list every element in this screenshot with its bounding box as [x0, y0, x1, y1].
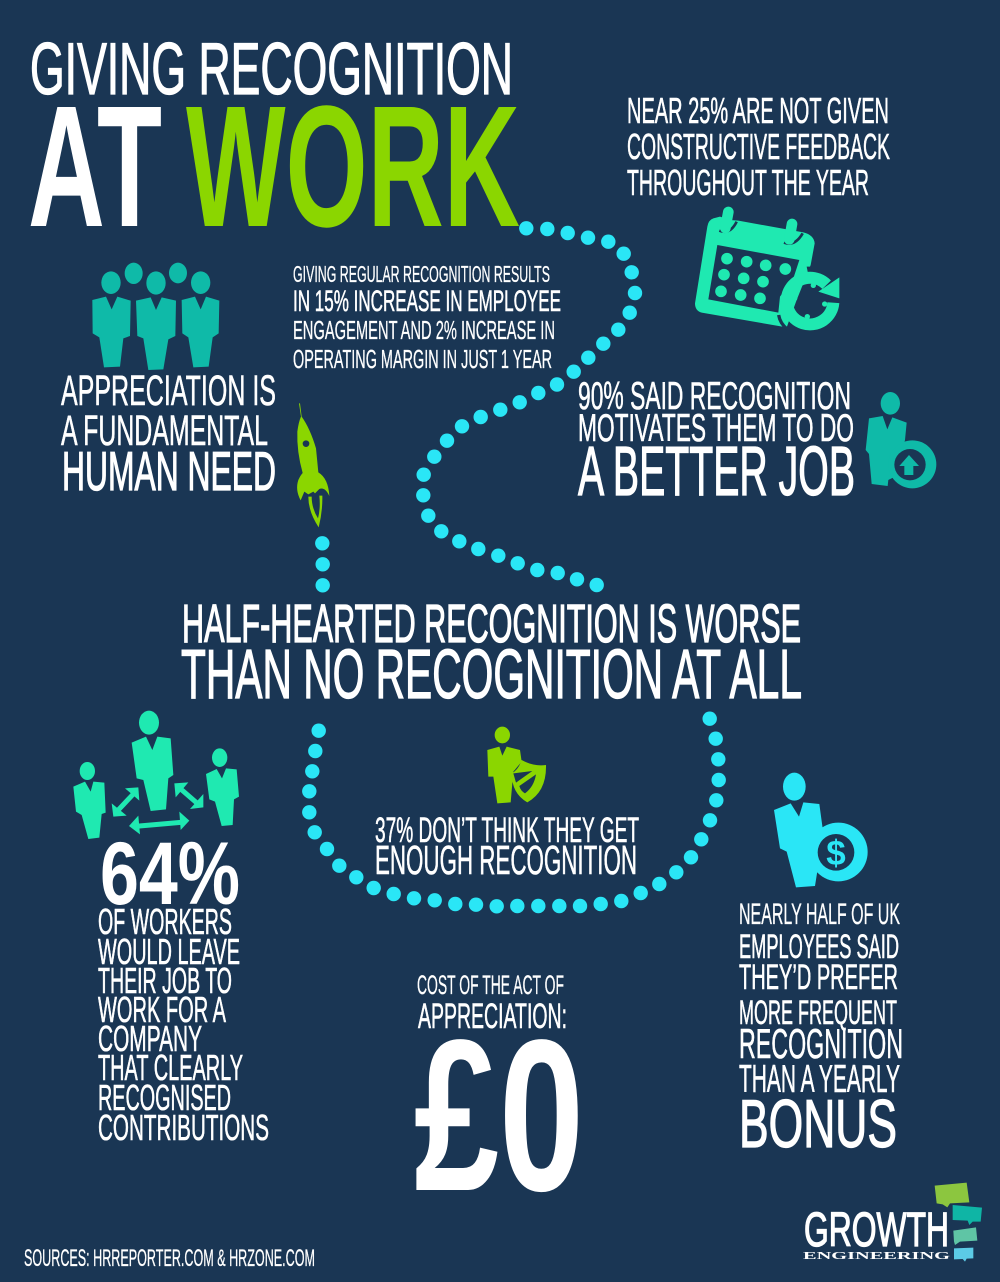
callout: cost of appreciation: £0 [414, 994, 584, 1236]
text block: 37 percent: 37% DON’T THINK THEY GET [375, 811, 639, 850]
stat: 64 percent of workers: CONTRIBUTIONS [98, 1107, 269, 1148]
text block: appreciation: APPRECIATION IS [61, 367, 276, 415]
text block: yearly bonus [739, 898, 903, 1162]
icon: person with dollar coin [774, 773, 868, 887]
stat: 64 percent of workers [98, 823, 269, 1148]
text block: 37 percent [375, 811, 639, 883]
title: WORK [186, 69, 520, 263]
text block: 90 percent motivated [578, 375, 855, 510]
sources: SOURCES: HRREPORTER.COM & HRZONE.COM [24, 1245, 315, 1272]
stat: 64 percent of workers: THAT CLEARLY [98, 1047, 243, 1088]
dotted path: lower arc [302, 712, 726, 914]
icon: calendar with clock [695, 212, 840, 330]
icon: person with up arrow [866, 392, 936, 488]
callout: cost of appreciation: APPRECIATION: [418, 997, 567, 1036]
text block: appreciation [61, 367, 276, 502]
icon: person with arrows between colleagues [73, 711, 239, 839]
text block: regular recognition results: ENGAGEMENT AND 2% INCREASE IN [293, 315, 555, 345]
icon: person with dollar coin: $ [826, 834, 846, 873]
stat: 64 percent of workers: OF WORKERS [98, 901, 232, 942]
dotted path: below rocket [315, 536, 330, 592]
icon: group of people [92, 263, 219, 370]
callout: cost of appreciation [414, 970, 584, 1236]
text block: regular recognition results [293, 261, 561, 374]
stat: 64 percent of workers: THEIR JOB TO [98, 960, 232, 1001]
icon: person with shield [487, 727, 546, 803]
title: AT [28, 69, 162, 263]
logo: growth engineering [803, 1183, 982, 1262]
text block: constructive feedback [627, 90, 890, 203]
stat: 64 percent of workers: WOULD LEAVE [98, 931, 240, 972]
text block: regular recognition results: IN 15% INCREASE IN EMPLOYEE [293, 285, 561, 318]
icon: rocket [297, 403, 329, 527]
text block: appreciation: A FUNDAMENTAL [61, 407, 268, 455]
text block: regular recognition results: GIVING REGULAR RECOGNITION RESULTS [293, 261, 550, 287]
stat: 64 percent of workers: RECOGNISED [98, 1077, 231, 1118]
stat: 64 percent of workers: COMPANY [98, 1018, 202, 1059]
stat: 64 percent of workers: 64% [100, 823, 240, 923]
logo: growth engineering: ENGINEERING [803, 1251, 950, 1262]
heading: half-hearted recognition [181, 594, 802, 713]
text block: regular recognition results: OPERATING MARGIN IN JUST 1 YEAR [293, 344, 552, 374]
stat: 64 percent of workers: WORK FOR A [98, 989, 226, 1030]
dotted path: upper winding trail [416, 221, 642, 592]
text block: appreciation: HUMAN NEED [62, 440, 276, 502]
title [28, 29, 520, 263]
callout: cost of appreciation: COST OF THE ACT OF [417, 970, 564, 1000]
text block: 37 percent: ENOUGH RECOGNITION [375, 837, 637, 883]
title: GIVING RECOGNITION [30, 29, 513, 110]
text block: yearly bonus: BONUS [739, 1086, 897, 1162]
